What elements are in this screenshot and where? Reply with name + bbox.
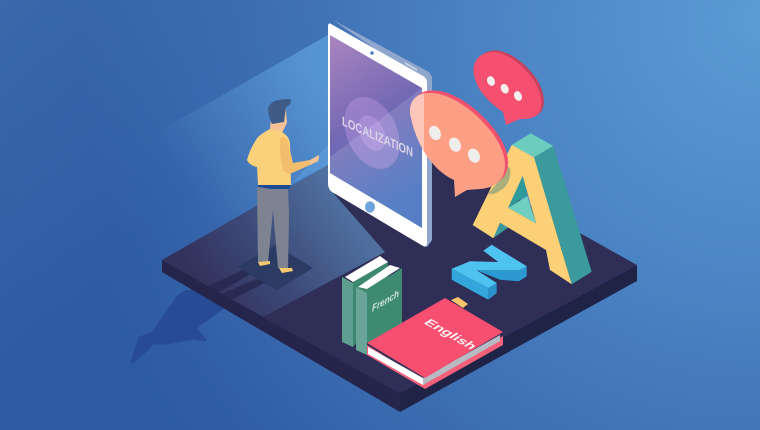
- letter A: [473, 133, 592, 284]
- English label: English: [420, 317, 480, 352]
- overlap tint from bubble: [488, 166, 510, 194]
- person: [247, 99, 319, 273]
- floor mat: [237, 245, 313, 290]
- home button: [365, 201, 375, 213]
- back book: [342, 256, 388, 347]
- letter Z: [452, 245, 527, 300]
- arm and hand: [280, 137, 319, 173]
- person shadow on platform: [197, 263, 286, 303]
- camera: [370, 51, 374, 55]
- torso: [247, 129, 291, 185]
- beam across screen: [330, 88, 422, 228]
- French label: French: [372, 288, 399, 315]
- bubble dots: [485, 75, 524, 102]
- tablet: [328, 20, 432, 247]
- neck: [270, 99, 287, 133]
- shadow below platform: [132, 290, 222, 362]
- French books: [342, 256, 402, 355]
- localization label: LOCALIZATION: [342, 114, 413, 160]
- book cover: [367, 298, 503, 378]
- English book: [367, 297, 503, 389]
- lit floor area: [162, 165, 385, 317]
- small speech bubble: [474, 50, 544, 125]
- trousers: [257, 187, 289, 268]
- belt: [258, 184, 291, 189]
- tablet body: [328, 23, 427, 247]
- large speech bubble: [410, 90, 508, 197]
- screen glow rings: [333, 88, 411, 178]
- tablet screen: [330, 35, 422, 228]
- hair: [268, 99, 291, 124]
- platform: [162, 132, 637, 412]
- lit bubble edge: [410, 93, 424, 151]
- bookmark: [451, 297, 468, 308]
- light beam from tablet: [140, 35, 328, 235]
- bubble dots: [427, 124, 482, 165]
- shoes: [258, 261, 293, 273]
- power button: [405, 62, 417, 71]
